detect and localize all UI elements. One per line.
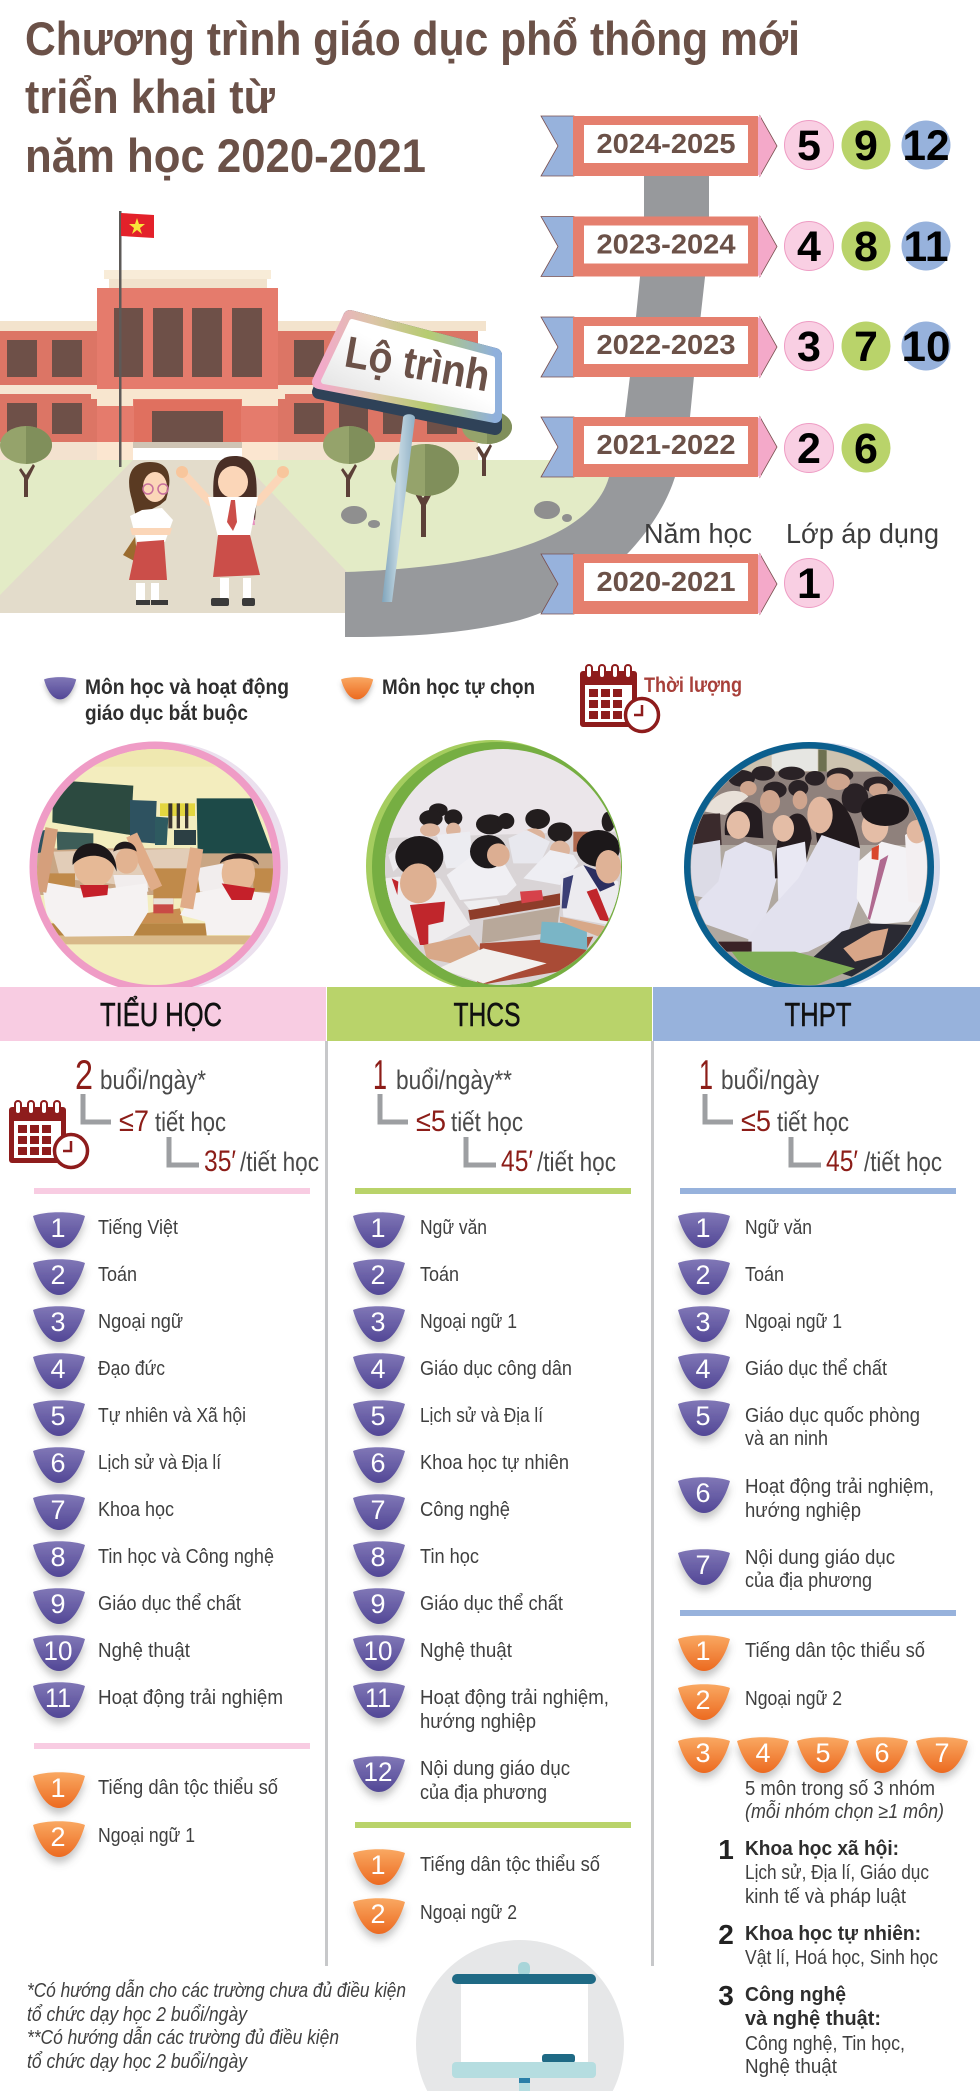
group 1: social sciences: kinh tế và pháp luật [745,1886,906,1908]
signpost pole [382,414,415,602]
roadmap row 2020-2021: 2020-2021 [596,566,736,597]
legend: compulsory subjects: Môn học và hoạt động [85,676,289,699]
subject list: TIỂU HỌC compulsory: Lịch sử và Địa lí [98,1452,221,1474]
subject list: THPT elective [678,1635,968,1823]
subject list: THCS compulsory: Nghệ thuật [420,1640,512,1662]
subject list: THCS compulsory: 11 [365,1683,391,1713]
subject list: THCS elective: Tiếng dân tộc thiểu số [420,1854,600,1876]
girl waving [176,456,289,606]
duration: THPT: ≤5 [741,1105,771,1138]
subject list: THPT compulsory: Hoạt động trải nghiệm, [745,1476,934,1498]
subject list: TIỂU HỌC elective: 1 [50,1773,66,1803]
subject list: THCS elective [353,1849,600,1934]
group 3: technology and arts: Nghệ thuật [745,2056,837,2078]
title: triển khai từ [25,70,276,123]
legend: compulsory subjects: giáo dục bắt buộc [85,701,248,725]
rocks [341,501,572,528]
subject list: TIỂU HỌC compulsory: Ngoại ngữ [98,1311,183,1333]
group 1: social sciences: Lịch sử, Địa lí, Giáo dục [745,1862,929,1884]
subject list: TIỂU HỌC compulsory: 9 [50,1589,66,1619]
subject list: TIỂU HỌC elective: Tiếng dân tộc thiểu số [98,1777,278,1799]
subject list: TIỂU HỌC compulsory: 1 [50,1213,66,1243]
subject list: THPT elective: Tiếng dân tộc thiểu số [745,1640,925,1662]
subject list: THCS compulsory: 12 [364,1757,392,1787]
roadmap row 2024-2025: 2024-2025 [596,128,736,159]
subject list: THPT compulsory: 6 [695,1478,711,1508]
roadmap row 2020-2021 [541,554,834,614]
subject list: TIỂU HỌC compulsory: Nghệ thuật [98,1640,190,1662]
subject list: TIỂU HỌC compulsory: 11 [45,1683,71,1713]
duration: TIỂU HỌC: tiết học [155,1107,226,1137]
footnotes: **Có hướng dẫn các trường đủ điều kiện [27,2026,339,2049]
school scene ground [0,460,625,613]
footnotes: tổ chức dạy học 2 buổi/ngày [27,2051,248,2073]
duration: TIỂU HỌC: buổi/ngày* [100,1065,206,1095]
subject list: THCS compulsory: 10 [364,1636,392,1666]
duration: THPT: /tiết học [864,1147,942,1177]
duration: TIỂU HỌC: 2 [75,1051,93,1098]
duration: THCS: 1 [373,1051,387,1098]
roadmap row 2023-2024 [541,216,950,276]
subject list: THCS compulsory: 9 [370,1589,386,1619]
roadmap row 2023-2024: 2023-2024 [596,228,736,260]
subject list: THPT compulsory: và an ninh [745,1428,828,1450]
subject list: TIỂU HỌC elective: Ngoại ngữ 1 [98,1825,195,1847]
duration: THCS: tiết học [451,1107,523,1137]
roadmap row 2021-2022: 2021-2022 [596,429,736,460]
subject list: THCS compulsory: 5 [370,1401,386,1431]
subject list: THCS compulsory: 3 [370,1307,386,1337]
roadmap row 2024-2025: 12 [902,122,950,170]
header: THCS: THCS [454,996,520,1033]
group 3: technology and arts: Công nghệ, Tin học, [745,2033,905,2055]
subject list: TIỂU HỌC compulsory: 3 [50,1307,66,1337]
group 2: natural sciences: Vật lí, Hoá học, Sinh học [745,1947,938,1969]
group 2: natural sciences [718,1919,938,1969]
subject list: THPT compulsory: 4 [695,1354,711,1384]
subject list: TIỂU HỌC compulsory: Tự nhiên và Xã hội [98,1405,246,1427]
subject list: THCS compulsory: 7 [370,1495,386,1525]
subject list: THCS elective: 2 [370,1899,386,1929]
subject list: THPT compulsory: Giáo dục quốc phòng [745,1405,920,1427]
subject list: THPT compulsory: 1 [695,1213,711,1243]
column labels [644,518,939,549]
signpost: Lộ trình: Lộ trình [341,328,494,401]
footnotes: tổ chức dạy học 2 buổi/ngày [27,2004,248,2026]
duration: THPT: buổi/ngày [721,1065,819,1095]
header: THCS [327,987,652,1041]
subject list: THPT elective: 5 môn trong số 3 nhóm [745,1778,935,1800]
subject list: TIỂU HỌC compulsory [33,1212,283,1718]
subject list: TIỂU HỌC compulsory: 2 [50,1260,66,1290]
subject list: TIỂU HỌC compulsory: Đạo đức [98,1358,165,1380]
subject list: TIỂU HỌC compulsory: 8 [50,1542,66,1572]
subject list: TIỂU HỌC compulsory: Tin học và Công nghệ [98,1546,274,1568]
duration: TIỂU HỌC: ≤7 [119,1105,149,1138]
duration: THCS: buổi/ngày** [396,1065,512,1095]
roadmap row 2022-2023: 2022-2023 [596,329,736,360]
duration: THPT: tiết học [777,1107,849,1137]
photo: lower secondary school [366,740,627,992]
subject list: THCS compulsory: 2 [370,1260,386,1290]
roadmap row 2021-2022: 6 [854,425,878,473]
subject list: THPT compulsory: hướng nghiệp [745,1500,861,1522]
roadmap row 2022-2023: 10 [902,323,950,371]
subject list: THCS compulsory: Hoạt động trải nghiệm, [420,1687,609,1709]
roadmap row 2022-2023: 3 [797,323,821,371]
school building [0,270,486,460]
legend: compulsory subjects [44,676,289,725]
subject list: THPT compulsory: Toán [745,1264,784,1286]
duration: THCS [373,1051,616,1178]
subject list: TIỂU HỌC compulsory: 6 [50,1448,66,1478]
subject list: THCS compulsory [353,1212,609,1804]
girl with glasses [123,462,173,605]
subject list: THPT compulsory: Nội dung giáo dục [745,1547,895,1569]
subject list: TIỂU HỌC compulsory: Khoa học [98,1499,174,1521]
subject list: THPT compulsory [678,1212,934,1592]
legend: duration [580,665,742,732]
header: THPT: THPT [784,996,852,1033]
roadmap row 2020-2021: 1 [797,560,821,608]
group 1: social sciences [718,1834,929,1908]
duration: THCS: ≤5 [416,1105,446,1138]
subject list: TIỂU HỌC compulsory: Tiếng Việt [98,1217,178,1239]
subject list: THPT elective: 5 [815,1738,831,1768]
subject list: TIỂU HỌC compulsory: Giáo dục thể chất [98,1593,241,1615]
roadmap row 2024-2025: 9 [854,122,878,170]
subject list: TIỂU HỌC compulsory: 4 [50,1354,66,1384]
subject list: THPT elective: 2 [695,1685,711,1715]
trees [0,410,512,537]
subject list: THCS elective: Ngoại ngữ 2 [420,1902,517,1924]
icon: presentation board [416,1940,624,2091]
header: TIỂU HỌC: TIỂU HỌC [100,996,222,1033]
subject list: TIỂU HỌC compulsory: Toán [98,1264,137,1286]
group 2: natural sciences: Khoa học tự nhiên: [745,1923,921,1945]
group 2: natural sciences: 2 [718,1919,734,1950]
subject list: THCS compulsory: Khoa học tự nhiên [420,1452,569,1474]
roadmap row 2023-2024: 4 [797,223,821,271]
title: Chương trình giáo dục phổ thông mới [25,12,800,65]
roadmap row 2021-2022: 2 [797,425,821,473]
group 1: social sciences: Khoa học xã hội: [745,1838,899,1860]
legend: elective subjects: Môn học tự chọn [382,676,535,699]
duration: TIỂU HỌC: 35′ [204,1145,236,1178]
roadmap row 2023-2024: 8 [854,223,878,271]
subject list: THPT compulsory: 5 [695,1401,711,1431]
subject list: THPT elective: 1 [695,1636,711,1666]
subject list: THCS compulsory: 6 [370,1448,386,1478]
group 3: technology and arts: và nghệ thuật: [745,2008,881,2030]
roadmap row 2024-2025 [541,116,950,176]
group 3: technology and arts [718,1980,905,2078]
duration: THCS: 45′ [501,1145,533,1178]
subject list: THCS compulsory: Tin học [420,1546,479,1568]
duration: TIỂU HỌC [9,1051,319,1178]
subject list: THCS compulsory: 4 [370,1354,386,1384]
photo: primary school [20,742,288,992]
subject list: THCS compulsory: Lịch sử và Địa lí [420,1405,543,1427]
subject list: THCS compulsory: Ngoại ngữ 1 [420,1311,517,1333]
subject list: THCS compulsory: Nội dung giáo dục [420,1758,570,1780]
subject list: THPT compulsory: Ngữ văn [745,1217,812,1239]
subject list: TIỂU HỌC elective: 2 [50,1822,66,1852]
subject list: THPT compulsory: Ngoại ngữ 1 [745,1311,842,1333]
roadmap row 2022-2023 [541,317,950,377]
subject list: THPT compulsory: 7 [695,1550,711,1580]
subject list: THCS compulsory: 1 [370,1213,386,1243]
subject list: TIỂU HỌC compulsory: 7 [50,1495,66,1525]
group 3: technology and arts: 3 [718,1980,734,2011]
subject list: THPT elective: 6 [874,1738,890,1768]
subject list: TIỂU HỌC compulsory: Hoạt động trải nghiệm [98,1687,283,1709]
group 1: social sciences: 1 [718,1834,734,1865]
title: năm học 2020-2021 [25,129,426,182]
subject list: THCS compulsory: Ngữ văn [420,1217,487,1239]
roadmap row 2021-2022 [541,417,890,477]
subject list: THPT elective: Ngoại ngữ 2 [745,1688,842,1710]
roadmap row 2024-2025: 5 [797,122,821,170]
duration: THPT: 1 [699,1051,713,1098]
roadmap row 2023-2024: 11 [904,223,948,271]
roadmap row 2022-2023: 7 [854,323,878,371]
header: TIỂU HỌC [0,987,326,1041]
subject list: THPT elective: (mỗi nhóm chọn ≥1 môn) [745,1800,944,1823]
signpost: Lộ trình [319,317,495,428]
subject list: THPT compulsory: Giáo dục thể chất [745,1358,887,1380]
subject list: THCS compulsory: Giáo dục công dân [420,1358,572,1380]
subject list: THCS compulsory: hướng nghiệp [420,1711,536,1733]
header: THPT [653,987,980,1041]
subject list: TIỂU HỌC compulsory: 5 [50,1401,66,1431]
duration: THPT: 45′ [826,1145,858,1178]
subject list: TIỂU HỌC compulsory: 10 [44,1636,72,1666]
footnotes: *Có hướng dẫn cho các trường chưa đủ điều kiện [27,1979,406,2002]
footnotes [27,1979,406,2073]
subject list: THCS compulsory: Toán [420,1264,459,1286]
title [25,12,800,182]
subject list: THPT compulsory: 3 [695,1307,711,1337]
subject list: THPT compulsory: của địa phương [745,1570,872,1592]
road [345,176,709,637]
duration: THCS: /tiết học [537,1147,616,1177]
flag and pole [119,211,154,467]
group 3: technology and arts: Công nghệ [745,1984,846,2006]
subject list: THCS compulsory: Công nghệ [420,1499,510,1521]
subject list: THCS elective: 1 [370,1850,386,1880]
column labels: Năm học [644,518,752,549]
subject list: THCS compulsory: Giáo dục thể chất [420,1593,563,1615]
duration: TIỂU HỌC: /tiết học [240,1147,319,1177]
subject list: THPT elective: 7 [934,1738,950,1768]
photo: upper secondary school [684,742,940,992]
subject list: TIỂU HỌC elective [33,1772,278,1857]
subject list: THCS compulsory: 8 [370,1542,386,1572]
subject list: THPT compulsory: 2 [695,1260,711,1290]
subject list: THPT elective: 3 [695,1738,711,1768]
legend: duration: Thời lượng [644,674,742,697]
subject list: THCS compulsory: của địa phương [420,1782,547,1804]
column labels: Lớp áp dụng [786,518,939,549]
duration: THPT [699,1051,942,1178]
subject list: THPT elective: 4 [755,1738,771,1768]
